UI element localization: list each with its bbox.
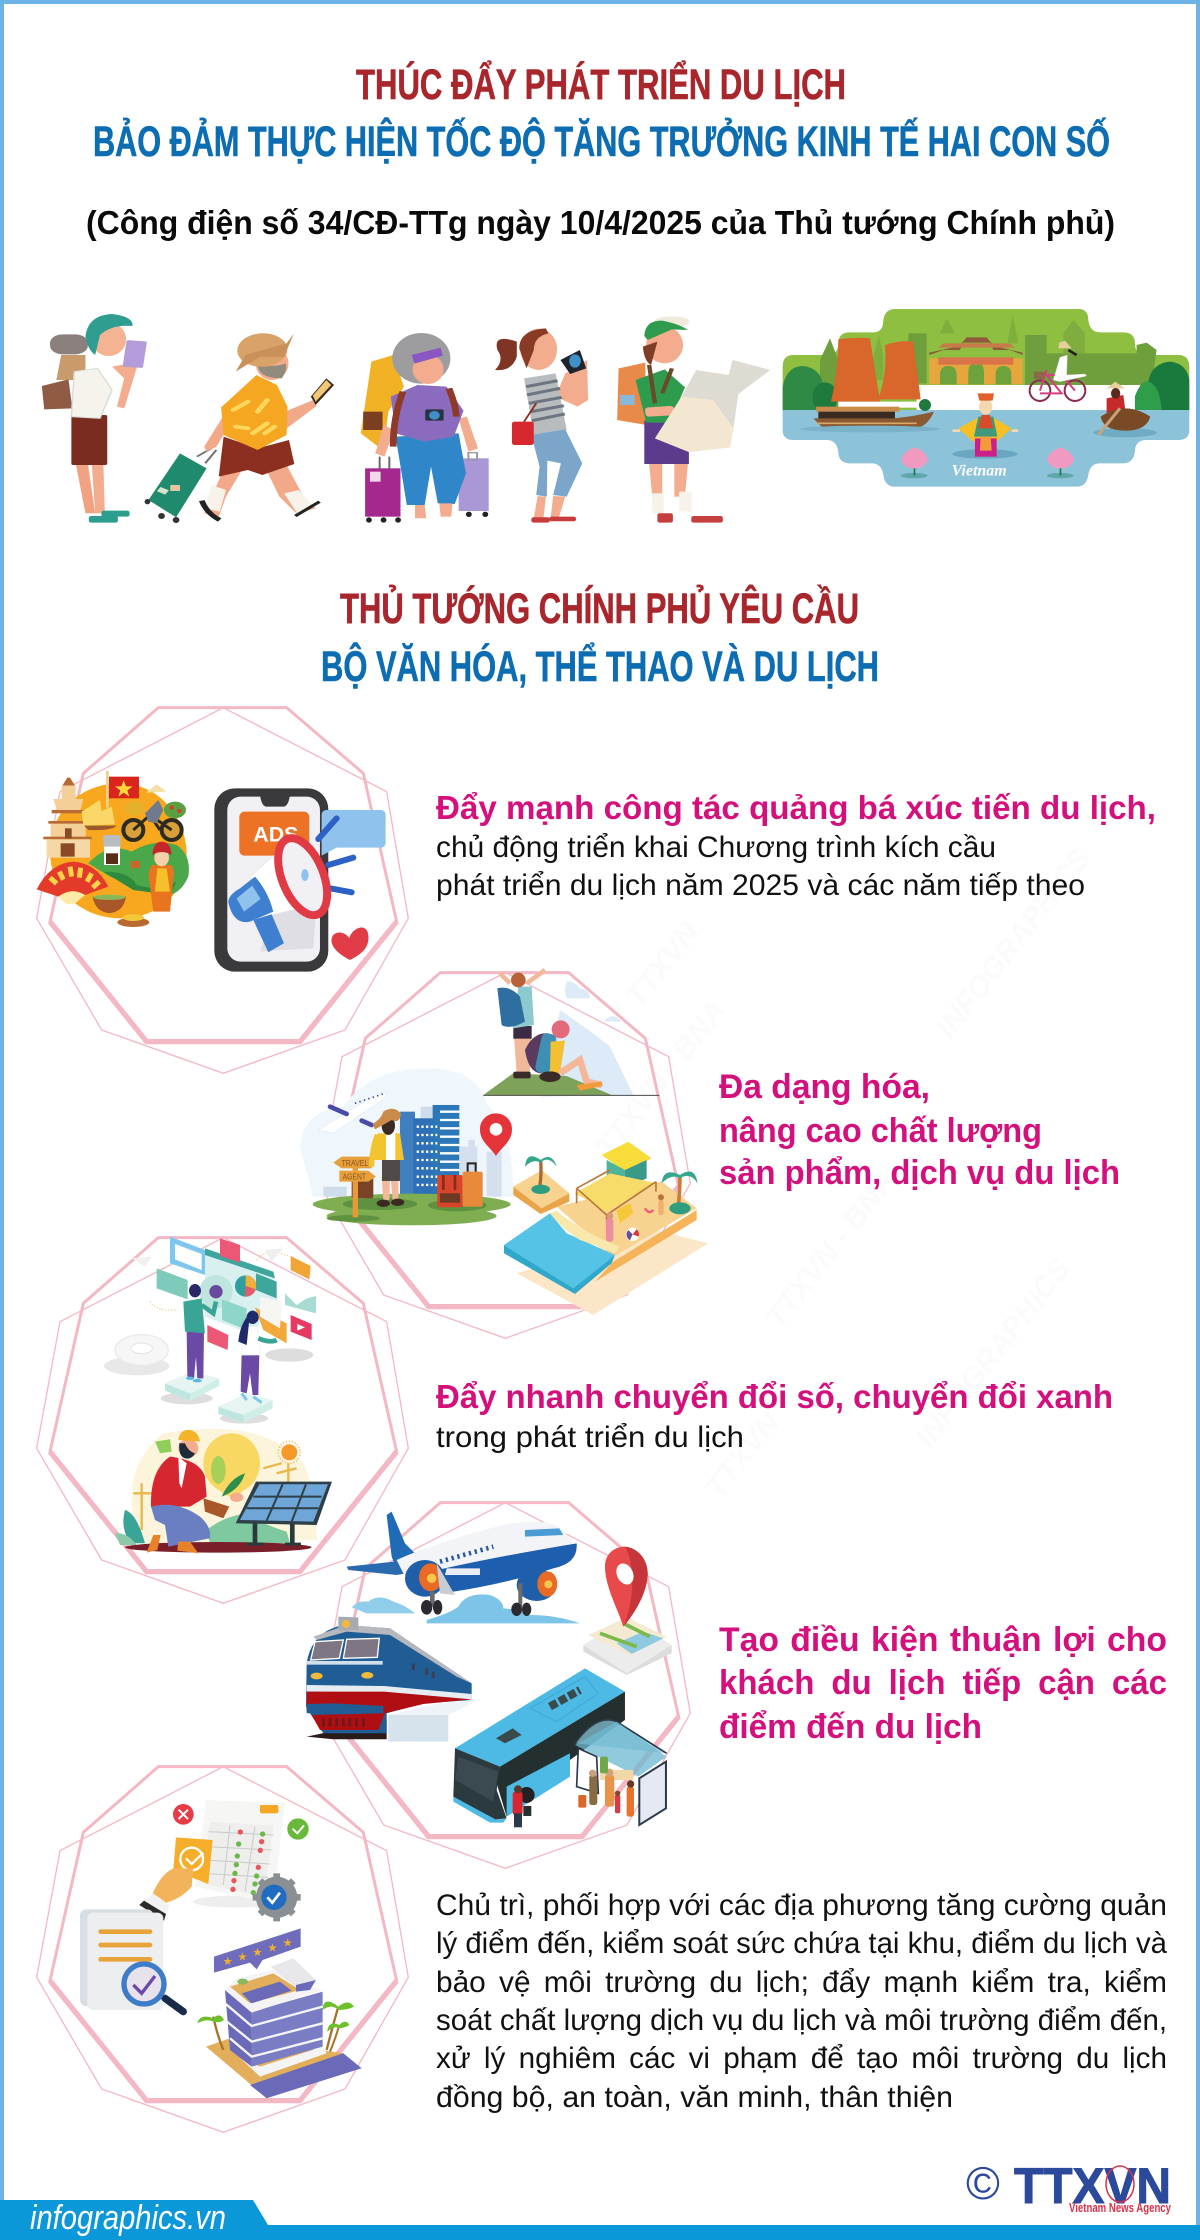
coracle <box>1093 382 1157 437</box>
junk boat <box>800 338 940 432</box>
text block 1 <box>436 789 1156 902</box>
water puppet <box>952 393 1018 459</box>
text block 5: lý điểm đến, kiểm soát sức chứa tại khu, điểm du lịch và <box>436 1927 1167 1960</box>
rating bubble: ★ <box>267 1940 277 1954</box>
text block 1: chủ động triển khai Chương trình kích cầu <box>436 831 996 864</box>
traveller: TRAVEL <box>342 1159 369 1168</box>
silhouettes <box>820 333 1157 410</box>
text block 5: Chủ trì, phối hợp với các địa phương tăng cường quản <box>436 1889 1167 1922</box>
hand and card <box>139 1837 213 1921</box>
junk <box>82 800 103 826</box>
green land <box>783 309 1189 410</box>
watermarks: TTXVN - BNA <box>590 994 732 1164</box>
footer bar <box>0 2199 1200 2240</box>
cyclist in ao dai <box>1030 341 1087 401</box>
logo TTXVN: TTXVN <box>1014 2158 1171 2214</box>
text block 3: trong phát triển du lịch <box>436 1421 744 1454</box>
logo TTXVN: © <box>966 2157 1000 2209</box>
illustration: digital transformation <box>104 1237 332 1553</box>
watermarks: TTXVN <box>620 915 707 1014</box>
temple gate <box>929 337 1023 384</box>
pagoda <box>43 778 92 858</box>
ground <box>313 1194 511 1215</box>
clouds <box>352 1597 415 1613</box>
traveller: AGENT <box>343 1173 366 1182</box>
subtitle: (Công điện số 34/CĐ-TTg ngày 10/4/2025 của Thủ tướng Chính phủ) <box>86 204 1115 241</box>
text block 3: Đẩy nhanh chuyển đổi số, chuyển đổi xanh <box>436 1378 1113 1415</box>
text block 5: bảo vệ môi trường du lịch; đẩy mạnh kiểm tra, kiểm <box>436 1966 1167 1999</box>
boy with map <box>617 316 770 523</box>
text block 2: nâng cao chất lượng <box>719 1112 1042 1150</box>
document and magnifier <box>80 1909 183 2012</box>
bushes <box>783 366 837 411</box>
train <box>306 1617 478 1742</box>
section heading <box>321 584 879 691</box>
beach people <box>606 1218 613 1242</box>
bicycle vendor <box>123 784 186 840</box>
illustration: destinations and beach <box>300 970 708 1315</box>
watermarks: TTXVN - BNA <box>760 1164 902 1334</box>
bowl <box>93 897 126 913</box>
rating bubble <box>214 1928 301 1973</box>
hikers on a hill <box>483 970 659 1097</box>
watermarks: INFOGRAPHICS <box>910 1253 1077 1454</box>
bus shelter <box>513 1720 667 1827</box>
frame 2 <box>319 973 690 1338</box>
illustration: phone with megaphone <box>214 788 386 972</box>
checklist sheet <box>193 1800 285 1908</box>
frame 3 <box>37 1238 408 1603</box>
hotel building <box>197 1958 362 2098</box>
title <box>93 60 1110 166</box>
palms <box>213 2017 223 2050</box>
Vietnam lettering: Vietnam <box>952 463 1007 480</box>
rating bubble: ★ <box>223 1954 233 1968</box>
text block 5 <box>436 1889 1167 2114</box>
lifeguard house <box>602 1142 652 1172</box>
plane <box>347 1512 577 1616</box>
white road <box>917 385 1140 411</box>
illustration: five tourists <box>42 314 770 523</box>
watermarks: INFOGRAPHICS <box>930 843 1097 1044</box>
frame 1 <box>37 708 408 1073</box>
map pin <box>480 1113 512 1156</box>
text block 1: phát triển du lịch năm 2025 và các năm tiếp theo <box>436 869 1085 902</box>
watermarks <box>590 843 1097 1504</box>
passengers <box>513 1757 634 1827</box>
section heading: BỘ VĂN HÓA, THỂ THAO VÀ DU LỊCH <box>321 642 879 691</box>
lotus flowers <box>901 447 1074 478</box>
gear <box>253 1873 301 1921</box>
footer bar: infographics.vn <box>30 2199 226 2237</box>
rating bubble: ★ <box>283 1936 293 1950</box>
woman in ao dai <box>148 842 174 912</box>
text block 5: soát chất lượng dịch vụ du lịch và môi trường điểm đến, <box>436 2004 1167 2037</box>
pin and map tile <box>583 1547 672 1675</box>
text block 5: đồng bộ, an toàn, văn minh, thân thiện <box>436 2081 953 2114</box>
fan <box>37 862 108 904</box>
watermarks: TTXVN <box>700 1405 787 1504</box>
water <box>783 410 1189 487</box>
city <box>323 1105 502 1197</box>
frame 5 <box>37 1767 408 2132</box>
plane <box>318 1092 387 1133</box>
section heading: THỦ TƯỚNG CHÍNH PHỦ YÊU CẦU <box>340 584 859 633</box>
rating bubble: ★ <box>252 1945 262 1959</box>
text block 4: điểm đến du lịch <box>719 1708 982 1746</box>
gear <box>104 1335 169 1375</box>
traveller <box>333 1109 404 1217</box>
text block 2: Đa dạng hóa, <box>719 1068 930 1106</box>
man <box>161 1284 219 1404</box>
illustration: inspection and hotel <box>80 1800 362 2098</box>
suitcases <box>437 1175 463 1207</box>
rating bubble: ★ <box>237 1950 247 1964</box>
illustration: Vietnam landscape panel <box>783 309 1189 487</box>
old man with suitcase <box>145 328 334 523</box>
coffee <box>103 835 121 847</box>
text block 4: Tạo điều kiện thuận lợi cho <box>719 1621 1167 1659</box>
text block 5: xử lý nghiêm các vi phạm để tạo môi trường du lịch <box>436 2042 1167 2075</box>
text block 2 <box>719 1068 1120 1192</box>
illustration: Vietnam tourism collage <box>37 771 189 927</box>
text block 2: sản phẩm, dịch vụ du lịch <box>719 1154 1120 1192</box>
title: THÚC ĐẨY PHÁT TRIỂN DU LỊCH <box>356 60 846 109</box>
beach island <box>504 1142 708 1315</box>
text block 4 <box>719 1621 1167 1746</box>
worker with plant and solar panel <box>115 1429 332 1553</box>
illustration: plane, train, bus, pin <box>306 1512 672 1827</box>
text block 3 <box>436 1378 1113 1454</box>
palm <box>678 1175 680 1207</box>
bus <box>453 1668 625 1823</box>
cross and tick badges <box>173 1804 194 1825</box>
frame 4 <box>319 1503 690 1868</box>
text block 1: Đẩy mạnh công tác quảng bá xúc tiến du lịch, <box>436 789 1156 826</box>
woman with camera <box>495 328 588 523</box>
screens <box>132 1237 316 1350</box>
old woman with suitcases <box>361 333 489 523</box>
small islet with palm <box>513 1170 569 1208</box>
woman <box>218 1311 277 1424</box>
tourist with phone <box>42 314 147 523</box>
text block 4: khách du lịch tiếp cận các <box>719 1664 1167 1702</box>
illustration: phone with megaphone: ADS <box>253 823 298 847</box>
